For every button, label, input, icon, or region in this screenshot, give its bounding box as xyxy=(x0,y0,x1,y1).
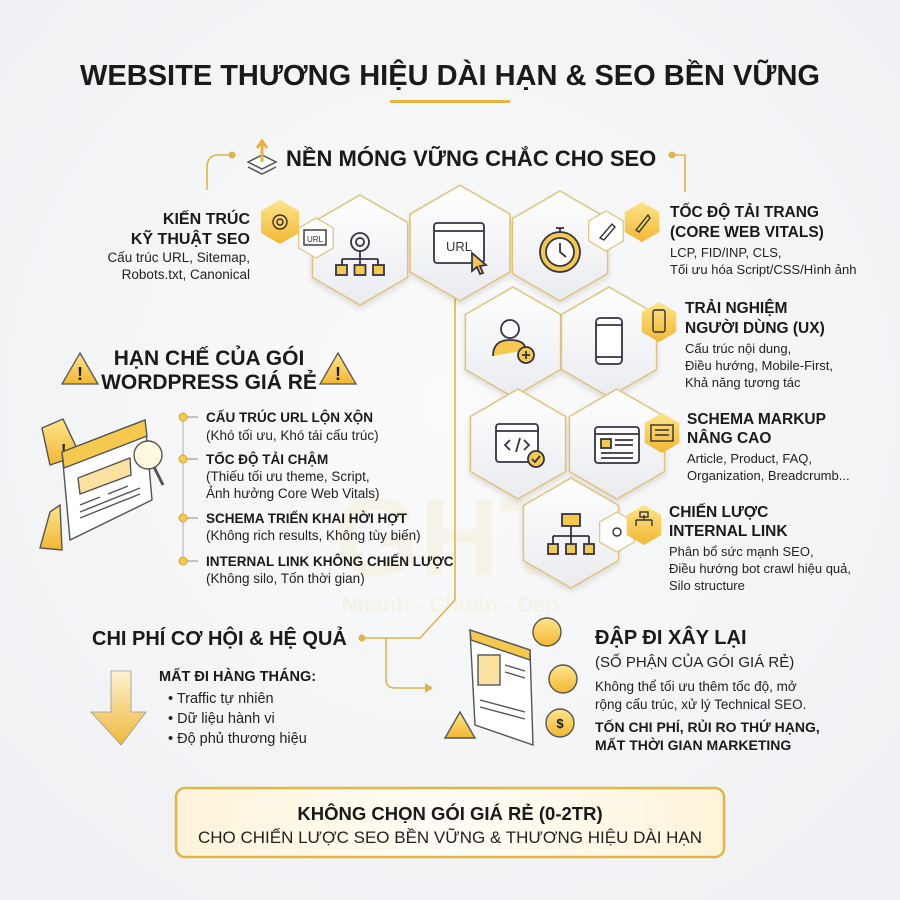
text: trai nghiem: TRẢI NGHIỆM xyxy=(685,299,787,317)
list: limitations: (Khó tối ưu, Khó tái cấu trúc) xyxy=(206,428,379,443)
hexagon cluster: URL xyxy=(307,235,324,244)
text: dap di xay lai: (SỐ PHẬN CỦA GÓI GIÁ RẺ) xyxy=(595,653,794,671)
text: internal link xyxy=(669,504,851,593)
text: toc do xyxy=(670,203,856,277)
text: mat di: • Độ phủ thương hiệu xyxy=(168,731,307,747)
text: kien truc: KỸ THUẬT SEO xyxy=(131,228,250,248)
text: internal link: CHIẾN LƯỢC xyxy=(669,504,768,521)
list: limitations: (Không silo, Tốn thời gian) xyxy=(206,571,365,586)
text: trai nghiem: Điều hướng, Mobile-First, xyxy=(685,358,833,373)
illustration: broken page with badges xyxy=(445,618,577,745)
text: schema xyxy=(687,411,850,483)
text: kien truc: Robots.txt, Canonical xyxy=(122,267,250,282)
watermark: Nhanh - Chuẩn - Đẹp xyxy=(341,592,559,617)
icon: url window: URL xyxy=(446,239,472,254)
text: toc do: (CORE WEB VITALS) xyxy=(670,224,824,241)
heading: han che xyxy=(62,346,356,394)
text: internal link: INTERNAL LINK xyxy=(669,523,788,540)
text: schema: SCHEMA MARKUP xyxy=(687,411,826,428)
text: dap di xay lai xyxy=(595,625,820,753)
text: dap di xay lai: ĐẬP ĐI XÂY LẠI xyxy=(595,625,747,649)
icon: schema page xyxy=(595,427,639,463)
text: trai nghiem: NGƯỜI DÙNG (UX) xyxy=(685,319,825,337)
heading: han che: ! xyxy=(77,364,83,384)
text: trai nghiem xyxy=(685,299,833,390)
text: mat di: • Dữ liệu hành vi xyxy=(168,711,275,727)
text: mat di: • Traffic tự nhiên xyxy=(168,691,274,707)
text: trai nghiem: Khả năng tương tác xyxy=(685,375,801,390)
list: limitations: INTERNAL LINK KHÔNG CHIẾN LƯỢC xyxy=(206,554,454,569)
list: limitations: Ảnh hưởng Core Web Vitals) xyxy=(206,486,379,501)
text: internal link: Phân bổ sức mạnh SEO, xyxy=(669,544,814,559)
icon: url window xyxy=(434,223,486,274)
icon: stopwatch xyxy=(540,228,580,272)
text: dap di xay lai: TỐN CHI PHÍ, RỦI RO THỨ HẠNG, xyxy=(595,718,820,735)
text: dap di xay lai: Không thể tối ưu thêm tốc độ, mở xyxy=(595,679,797,694)
text: toc do: TỐC ĐỘ TẢI TRANG xyxy=(670,203,819,221)
illustration: broken website with magnifier xyxy=(40,419,163,550)
callout: bottom box xyxy=(176,788,724,857)
text: schema: Article, Product, FAQ, xyxy=(687,451,812,466)
title: WEBSITE THƯƠNG HIỆU DÀI HẠN & SEO BỀN VỮNG xyxy=(80,58,820,92)
illustration: broken page with badges: $ xyxy=(556,716,564,731)
list: limitations: TỐC ĐỘ TẢI CHẬM xyxy=(206,452,328,467)
connector lines xyxy=(207,155,685,688)
list: limitations: (Thiếu tối ưu theme, Script, xyxy=(206,469,370,484)
heading: nen mong: NỀN MÓNG VỮNG CHẮC CHO SEO xyxy=(286,146,656,171)
heading: han che: WORDPRESS GIÁ RẺ xyxy=(101,371,317,394)
heading: han che: ! xyxy=(335,364,341,384)
callout: bottom box: CHO CHIẾN LƯỢC SEO BỀN VỮNG & THƯƠNG HIỆU DÀI HẠN xyxy=(198,828,702,847)
text: mat di xyxy=(159,668,316,747)
text: kien truc xyxy=(107,209,250,282)
watermark: GHT xyxy=(334,476,566,599)
icon: sitemap xyxy=(548,514,594,554)
hexagon cluster xyxy=(261,185,679,588)
icon: gear tree xyxy=(336,233,384,275)
text: dap di xay lai: rộng cấu trúc, xử lý Technical SEO. xyxy=(595,697,806,712)
text: trai nghiem: Cấu trúc nội dung, xyxy=(685,341,791,356)
text: internal link: Silo structure xyxy=(669,578,745,593)
text: mat di: MẤT ĐI HÀNG THÁNG: xyxy=(159,668,316,685)
arrow: down xyxy=(91,671,146,745)
icon: phone xyxy=(596,318,622,364)
text: toc do: LCP, FID/INP, CLS, xyxy=(670,245,782,260)
text: schema: Organization, Breadcrumb... xyxy=(687,468,850,483)
heading: nen mong xyxy=(248,141,656,174)
icon: code window xyxy=(496,424,544,467)
list: limitations: (Không rich results, Không tùy biến) xyxy=(206,528,421,543)
list: limitations: SCHEMA TRIỂN KHAI HỜI HỢT xyxy=(206,511,408,526)
text: schema: NÂNG CAO xyxy=(687,429,771,447)
icon: user add xyxy=(493,320,534,363)
text: toc do: Tối ưu hóa Script/CSS/Hình ảnh xyxy=(670,262,856,277)
icon: layers up arrow xyxy=(248,141,276,174)
list: limitations: CẤU TRÚC URL LỘN XỘN xyxy=(206,410,373,425)
text: dap di xay lai: MẤT THỜI GIAN MARKETING xyxy=(595,736,791,753)
text: internal link: Điều hướng bot crawl hiệu quả, xyxy=(669,561,851,576)
illustration: broken website with magnifier: ! xyxy=(61,442,66,459)
list: limitations xyxy=(179,410,454,586)
text: kien truc: Cấu trúc URL, Sitemap, xyxy=(107,250,250,265)
heading: chi phi co hoi: CHI PHÍ CƠ HỘI & HỆ QUẢ xyxy=(92,626,347,650)
small hex badges xyxy=(299,211,634,552)
text: kien truc: KIẾN TRÚC xyxy=(163,209,250,228)
callout: bottom box: KHÔNG CHỌN GÓI GIÁ RẺ (0-2TR) xyxy=(297,803,603,824)
heading: han che: HẠN CHẾ CỦA GÓI xyxy=(114,346,304,370)
